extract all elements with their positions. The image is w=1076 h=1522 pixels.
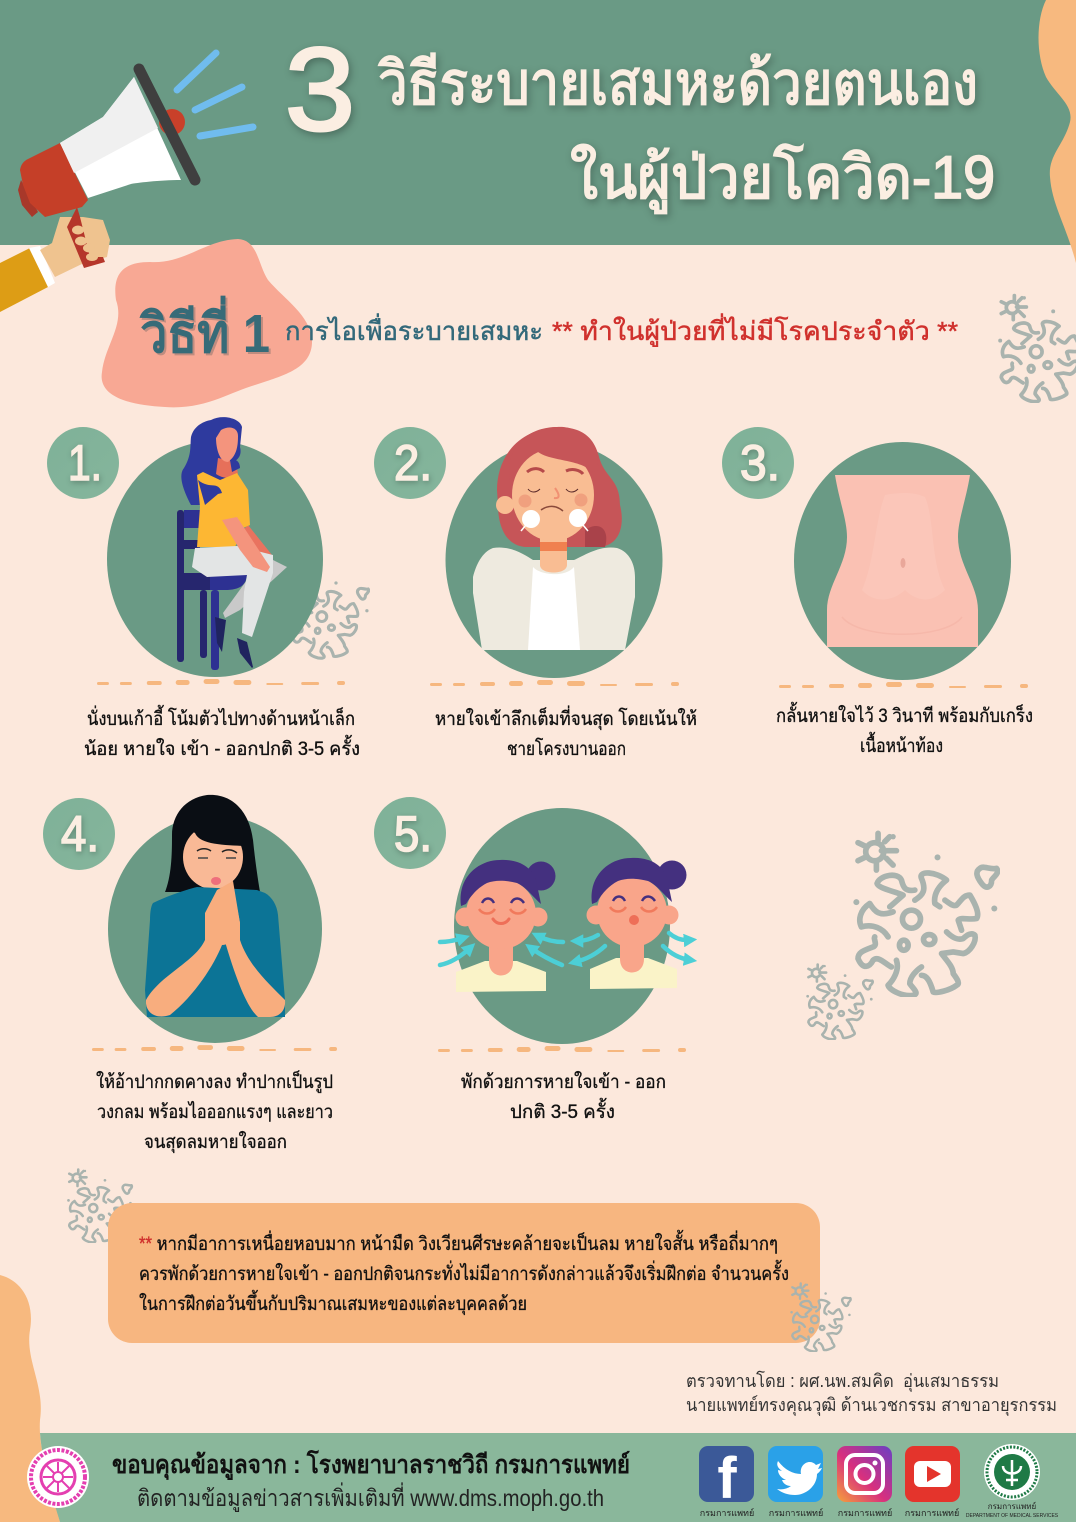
title bbox=[285, 24, 995, 214]
icon: twitter bbox=[768, 1446, 823, 1518]
step 4 caption: วงกลม พร้อมไอออกแรงๆ และยาว bbox=[97, 1101, 333, 1123]
step 2 number badge bbox=[374, 427, 446, 499]
step 4 illustration: woman coughing bbox=[108, 795, 322, 1043]
icon: megaphone held in a hand bbox=[0, 69, 195, 312]
icon: facebook bbox=[699, 1446, 754, 1518]
step 2 divider bbox=[430, 680, 679, 686]
arrows: airflow bbox=[440, 933, 690, 965]
step 3 caption: กลั้นหายใจไว้ 3 วินาที พร้อมกับเกร็ง bbox=[776, 702, 1033, 727]
step 4 number badge bbox=[43, 798, 115, 870]
footer text: ขอบคุณข้อมูลจาก : โรงพยาบาลราชวิถี กรมการแพทย์ bbox=[112, 1449, 630, 1481]
icon: twitter: กรมการแพทย์ bbox=[769, 1507, 823, 1518]
step 2 caption bbox=[435, 705, 697, 760]
footer band bbox=[40, 1433, 1076, 1522]
footer text bbox=[112, 1449, 630, 1512]
ministry logo bbox=[966, 1444, 1059, 1519]
hospital logo bbox=[27, 1446, 89, 1508]
step 1 number badge bbox=[47, 427, 119, 499]
title: 3 bbox=[285, 24, 355, 156]
icon: facebook: กรมการแพทย์ bbox=[700, 1507, 754, 1518]
step 1 caption: นั่งบนเก้าอี้ โน้มตัวไปทางด้านหน้าเล็ก bbox=[87, 705, 355, 730]
header band bbox=[0, 0, 1076, 245]
ministry logo: กรมการแพทย์ bbox=[988, 1501, 1036, 1511]
virus decoration step 1 bbox=[290, 570, 369, 658]
note panel: ** หากมีอาการเหนื่อยหอบมาก หน้ามืด วิงเวียนศีรษะคล้ายจะเป็นลม หายใจสั้น หรือถี่มากๆ bbox=[139, 1230, 778, 1255]
step 5 illustration: breathing in and out bbox=[440, 808, 690, 1044]
step 3 number badge bbox=[722, 427, 794, 499]
step 2 caption: หายใจเข้าลึกเต็มที่จนสุด โดยเน้นให้ bbox=[435, 705, 697, 731]
step 2 number badge: 2. bbox=[394, 435, 432, 491]
step 2 illustration: woman breathing in bbox=[446, 427, 662, 678]
step 4 caption bbox=[96, 1069, 333, 1154]
section heading: method 1: ** ทำในผู้ป่วยที่ไม่มีโรคประจำตัว ** bbox=[552, 313, 958, 347]
step 3 caption bbox=[776, 702, 1033, 757]
step 1 caption bbox=[84, 705, 360, 760]
reviewer credit: ตรวจทานโดย : ผศ.นพ.สมคิด อุ่นเสมาธรรม bbox=[686, 1370, 999, 1392]
step 4 caption: ให้อ้าปากกดคางลง ทำปากเป็นรูป bbox=[96, 1069, 333, 1093]
icon: instagram bbox=[837, 1446, 892, 1518]
ministry logo: DEPARTMENT OF MEDICAL SERVICES bbox=[966, 1513, 1059, 1519]
reviewer credit bbox=[686, 1370, 1057, 1416]
step 3 caption: เนื้อหน้าท้อง bbox=[860, 732, 943, 757]
step 1 divider bbox=[97, 679, 345, 685]
section blob bbox=[102, 239, 312, 407]
virus decoration large bbox=[853, 833, 998, 996]
section heading: method 1 bbox=[139, 295, 958, 364]
title: วิธีระบายเสมหะด้วยตนเอง bbox=[378, 50, 978, 117]
icon: instagram: กรมการแพทย์ bbox=[838, 1507, 892, 1518]
footer text: ติดตามข้อมูลข่าวสารเพิ่มเติมที่ www.dms.moph.go.th bbox=[137, 1482, 604, 1512]
step 4 divider bbox=[92, 1045, 337, 1051]
icon: facebook: f bbox=[717, 1446, 737, 1511]
face breathing in bbox=[456, 860, 556, 992]
step 1 illustration: woman on chair bbox=[107, 417, 323, 677]
step 5 caption: พักด้วยการหายใจเข้า - ออก bbox=[461, 1071, 666, 1093]
icon: youtube: กรมการแพทย์ bbox=[905, 1507, 959, 1518]
title: ในผู้ป่วยโควิด-19 bbox=[570, 143, 995, 214]
virus decoration top right bbox=[998, 296, 1076, 402]
note panel bbox=[108, 1203, 820, 1343]
virus decoration on note corner bbox=[790, 1283, 851, 1351]
note panel: ควรพักด้วยการหายใจเข้า - ออกปกติจนกระทั่งไม่มีอาการดังกล่าวแล้วจึงเริ่มฝึกต่อ จำนวนครั้ง bbox=[139, 1260, 789, 1285]
step 4 number badge: 4. bbox=[61, 806, 99, 862]
section heading: method 1: วิธีที่ 1 bbox=[139, 295, 270, 364]
icon: youtube bbox=[905, 1446, 960, 1518]
step 3 divider bbox=[779, 682, 1028, 688]
icon: blue sound rays bbox=[177, 53, 253, 136]
step 4 caption: จนสุดลมหายใจออก bbox=[144, 1131, 287, 1154]
step 5 number badge bbox=[374, 797, 446, 869]
step 1 number badge: 1. bbox=[68, 435, 102, 491]
decorative orange blob bottom left bbox=[0, 1275, 60, 1522]
step 5 divider bbox=[438, 1046, 686, 1052]
step 2 caption: ชายโครงบานออก bbox=[507, 737, 626, 760]
step 5 caption: ปกติ 3-5 ครั้ง bbox=[510, 1098, 615, 1123]
step 3 number badge: 3. bbox=[740, 435, 780, 491]
step 1 caption: น้อย หายใจ เข้า - ออกปกติ 3-5 ครั้ง bbox=[84, 735, 360, 760]
decorative orange blob top right bbox=[1038, 0, 1076, 263]
virus decoration above note bbox=[67, 1170, 132, 1242]
step 5 caption bbox=[461, 1071, 666, 1123]
section heading: method 1: การไอเพื่อระบายเสมหะ bbox=[285, 313, 543, 346]
note panel: ในการฝึกต่อวันขึ้นกับปริมาณเสมหะของแต่ละบุคคลด้วย bbox=[139, 1290, 527, 1316]
step 5 number badge: 5. bbox=[394, 806, 432, 862]
face breathing out bbox=[586, 858, 686, 989]
virus decoration small bbox=[806, 965, 873, 1039]
step 3 illustration: abdomen bbox=[794, 442, 1011, 680]
